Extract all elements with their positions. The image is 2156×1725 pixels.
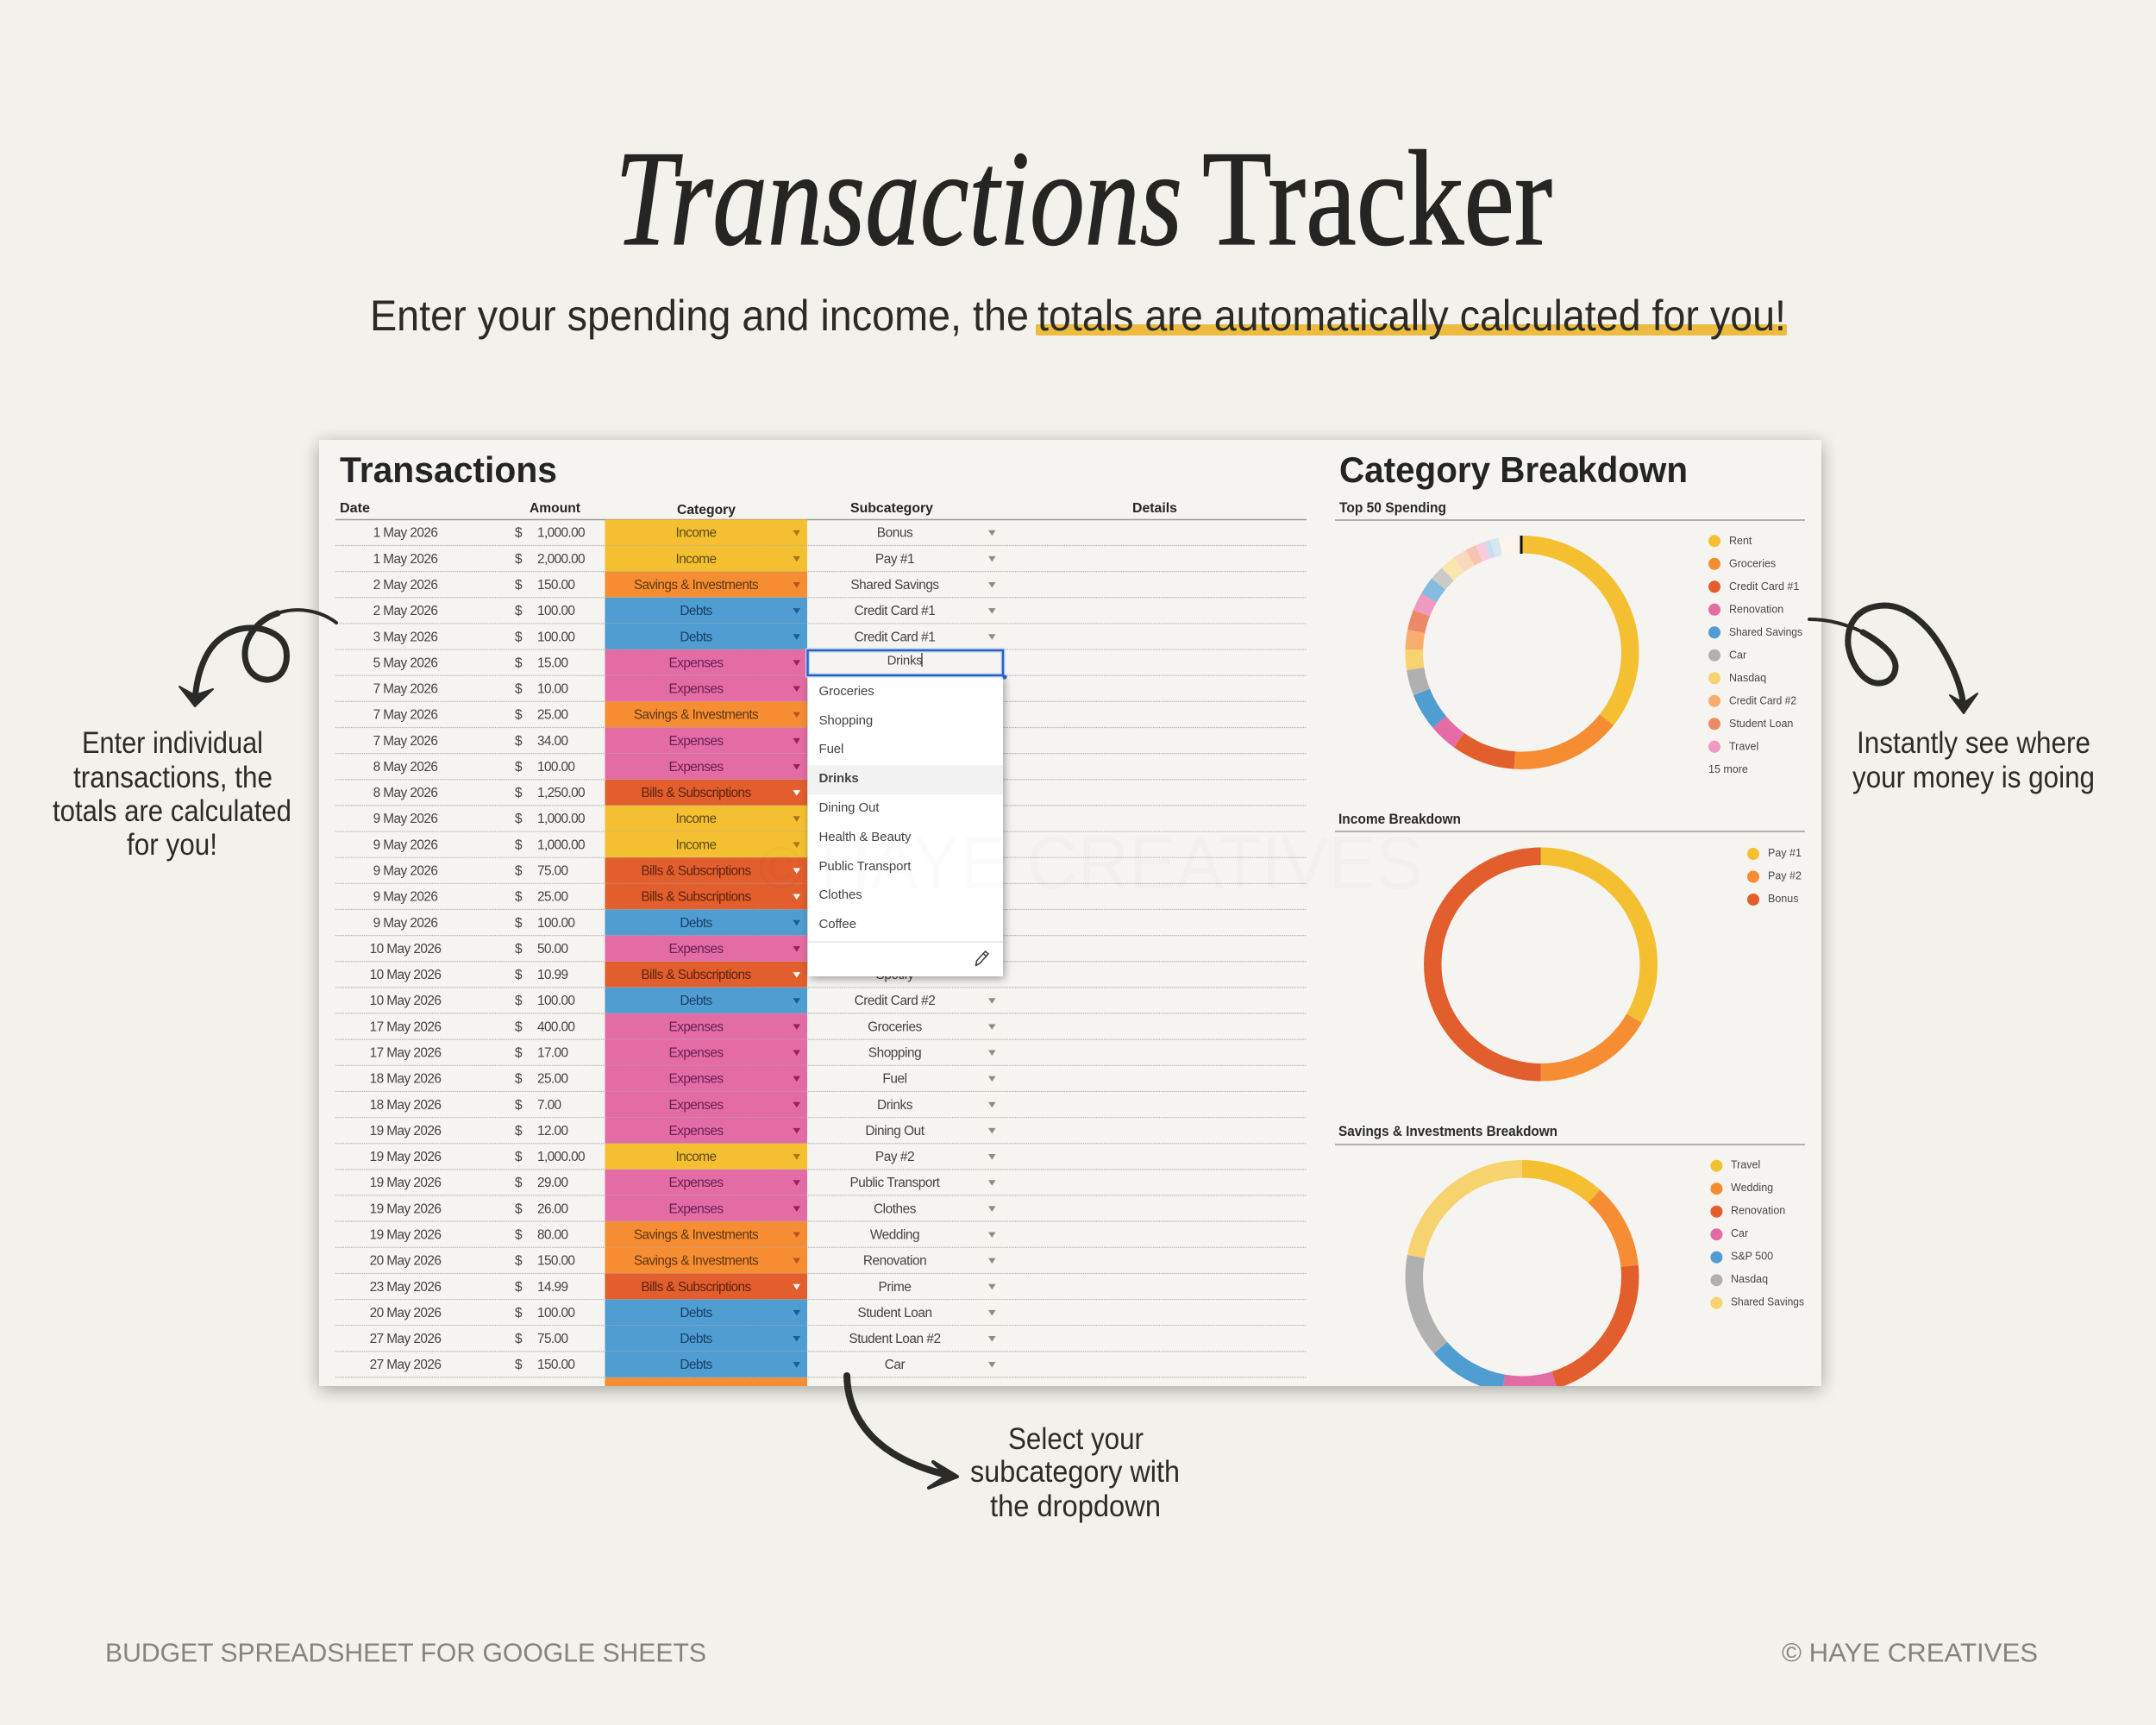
table row 28 bbox=[335, 1221, 1307, 1248]
donut chart: Savings and Investments Breakdown bbox=[1414, 1169, 1630, 1385]
table row 15: 25.00 bbox=[537, 890, 567, 905]
table row 17: 10 May 2026 bbox=[370, 942, 441, 957]
section heading: Income Breakdown: Income Breakdown bbox=[1338, 811, 1461, 827]
table row 27: $ bbox=[515, 1201, 523, 1216]
table row 21: $ bbox=[515, 1045, 523, 1060]
legend: Income Breakdown: Bonus bbox=[1768, 893, 1798, 905]
table row 22: $ bbox=[515, 1072, 523, 1087]
table row 32: $ bbox=[515, 1332, 523, 1346]
active input cell bbox=[807, 650, 1007, 680]
section heading: Top 50 Spending: Top 50 Spending bbox=[1339, 499, 1446, 516]
table row 14: $ bbox=[515, 864, 523, 879]
table row 5: 100.00 bbox=[537, 630, 574, 644]
table row 27: 26.00 bbox=[537, 1201, 567, 1216]
table row 30: Bills & Subscriptions bbox=[641, 1280, 752, 1295]
callout: bottom bbox=[970, 1421, 1180, 1523]
table row 29: Renovation bbox=[863, 1254, 926, 1269]
table row 12: 9 May 2026 bbox=[373, 812, 437, 826]
subtitle with highlight bbox=[370, 292, 1787, 340]
table row 31 bbox=[335, 1300, 1307, 1326]
legend: Savings and Investments Breakdown: Car bbox=[1731, 1227, 1748, 1239]
spreadsheet panel shadow bbox=[319, 443, 1821, 1389]
table row 5: 3 May 2026 bbox=[373, 630, 437, 644]
table row 31: Debts bbox=[680, 1306, 713, 1320]
table row 25: $ bbox=[515, 1150, 523, 1164]
table row 30 bbox=[335, 1274, 1307, 1300]
table row 27: 19 May 2026 bbox=[370, 1201, 441, 1216]
table row 29: $ bbox=[515, 1254, 523, 1269]
table row 2 bbox=[335, 546, 1307, 572]
legend: Savings and Investments Breakdown: Travel bbox=[1731, 1159, 1760, 1171]
table row 16: Debts bbox=[680, 916, 713, 931]
table row 10: 100.00 bbox=[537, 760, 574, 775]
callout: right: your money is going bbox=[1852, 760, 2095, 794]
table row 14: Bills & Subscriptions bbox=[641, 864, 752, 879]
table row 30: 14.99 bbox=[537, 1280, 567, 1295]
donut chart: Income Breakdown bbox=[1432, 856, 1649, 1072]
dropdown menu shadow bbox=[810, 678, 1005, 979]
callout: left bbox=[53, 725, 291, 862]
table row 17: $ bbox=[515, 942, 523, 957]
table row 5 bbox=[335, 624, 1307, 650]
table row 30: $ bbox=[515, 1280, 523, 1295]
legend: Savings and Investments Breakdown: Wedding bbox=[1731, 1182, 1773, 1194]
table header bbox=[335, 501, 1307, 519]
table row 4: $ bbox=[515, 604, 523, 618]
table row 1 bbox=[335, 519, 1307, 546]
table row 20: 400.00 bbox=[537, 1019, 574, 1034]
table row 24: Dining Out bbox=[865, 1124, 925, 1138]
table row 6: 5 May 2026 bbox=[373, 656, 437, 670]
callout: bottom: the dropdown bbox=[990, 1489, 1161, 1523]
table row 24: Expenses bbox=[669, 1124, 724, 1138]
table row 33: Car bbox=[885, 1358, 906, 1372]
table row 15: Bills & Subscriptions bbox=[641, 890, 752, 905]
active input cell: Drinks bbox=[887, 654, 922, 668]
legend: Savings and Investments Breakdown bbox=[1710, 1159, 1804, 1309]
table row 18: Spotify bbox=[876, 968, 914, 982]
dropdown menu: Health & Beauty bbox=[819, 830, 912, 844]
title: Transactions bbox=[615, 123, 1182, 274]
table row 6: $ bbox=[515, 656, 523, 670]
dropdown menu: Clothes bbox=[819, 888, 862, 902]
table row 22: 18 May 2026 bbox=[370, 1072, 441, 1087]
table row 9: $ bbox=[515, 734, 523, 749]
table row 4: Debts bbox=[680, 604, 713, 618]
table row 12: Income bbox=[676, 812, 717, 826]
table row 12: $ bbox=[515, 812, 523, 826]
legend: Top 50 Spending: Credit Card #1 bbox=[1729, 580, 1799, 593]
legend: Top 50 Spending: Credit Card #2 bbox=[1729, 695, 1796, 707]
dropdown menu bbox=[808, 675, 1003, 976]
table row 8: 25.00 bbox=[537, 708, 567, 723]
table row 19: $ bbox=[515, 994, 523, 1008]
table row 33: $ bbox=[515, 1358, 523, 1372]
table row 19: Credit Card #2 bbox=[855, 994, 935, 1008]
panel heading: Transactions: Transactions bbox=[340, 449, 557, 490]
table row 9 bbox=[335, 728, 1307, 754]
table row 30: Prime bbox=[879, 1280, 911, 1295]
table row 10 bbox=[335, 754, 1307, 780]
table row 18: $ bbox=[515, 968, 523, 982]
table row 1: 1 May 2026 bbox=[373, 526, 437, 541]
table row 7: $ bbox=[515, 682, 523, 697]
callout: right bbox=[1852, 725, 2095, 794]
table row 21: 17 May 2026 bbox=[370, 1045, 441, 1060]
table row 6: 15.00 bbox=[537, 656, 567, 670]
table row 26: 19 May 2026 bbox=[370, 1176, 441, 1190]
table row 3: 2 May 2026 bbox=[373, 578, 437, 593]
table row 19: Debts bbox=[680, 994, 713, 1008]
subtitle with highlight: Enter your spending and income, the bbox=[370, 292, 1029, 340]
title: Tracker bbox=[1202, 123, 1552, 274]
table row 19: 100.00 bbox=[537, 994, 574, 1008]
table row 4 bbox=[335, 598, 1307, 624]
footer: right credit: © HAYE CREATIVES bbox=[1782, 1637, 2038, 1668]
legend: Savings and Investments Breakdown: Shared Savings bbox=[1731, 1295, 1804, 1308]
table row 22 bbox=[335, 1065, 1307, 1092]
arrow: bottom bbox=[847, 1376, 957, 1488]
table row 25: 1,000.00 bbox=[537, 1150, 585, 1164]
table row 1: 1,000.00 bbox=[537, 526, 585, 541]
callout: left: Enter individual bbox=[82, 725, 263, 760]
table row 27 bbox=[335, 1195, 1307, 1222]
table row 22: 25.00 bbox=[537, 1072, 567, 1087]
table row 21 bbox=[335, 1039, 1307, 1066]
table row 8: $ bbox=[515, 708, 523, 723]
table row 13 bbox=[335, 831, 1307, 858]
table row 17: 50.00 bbox=[537, 942, 567, 957]
table row 10: 8 May 2026 bbox=[373, 760, 437, 775]
table row 11: Bills & Subscriptions bbox=[641, 786, 752, 800]
table row 10: Expenses bbox=[669, 760, 724, 775]
table row 25 bbox=[335, 1144, 1307, 1170]
legend: Top 50 Spending: 15 more bbox=[1708, 763, 1748, 775]
table row 23: 7.00 bbox=[537, 1098, 561, 1113]
legend: Income Breakdown: Pay #2 bbox=[1768, 869, 1802, 881]
callout: left: transactions, the bbox=[73, 760, 273, 794]
table row 14: 9 May 2026 bbox=[373, 864, 437, 879]
dropdown menu: Public Transport bbox=[819, 859, 912, 874]
table row 7: 7 May 2026 bbox=[373, 682, 437, 697]
legend: Savings and Investments Breakdown: Nasdaq bbox=[1731, 1273, 1768, 1285]
table row 29: 20 May 2026 bbox=[370, 1254, 441, 1269]
table row 4: 100.00 bbox=[537, 604, 574, 618]
dropdown menu: Fuel bbox=[819, 742, 843, 756]
table row 28: 80.00 bbox=[537, 1227, 567, 1242]
table row 13: 9 May 2026 bbox=[373, 837, 437, 852]
table row 28: $ bbox=[515, 1227, 523, 1242]
table row 20: Expenses bbox=[669, 1019, 724, 1034]
table row 11: 1,250.00 bbox=[537, 786, 585, 800]
table row 8: Savings & Investments bbox=[634, 708, 759, 723]
table row 11: $ bbox=[515, 786, 523, 800]
table row 3 bbox=[335, 572, 1307, 598]
table row 32 bbox=[335, 1326, 1307, 1352]
table row 1: Bonus bbox=[877, 526, 913, 541]
table row 32: 75.00 bbox=[537, 1332, 567, 1346]
table row 13: $ bbox=[515, 837, 523, 852]
table row 1: Income bbox=[676, 526, 717, 541]
table row 10: $ bbox=[515, 760, 523, 775]
table row 9: Expenses bbox=[669, 734, 724, 749]
table header: Date bbox=[340, 501, 370, 516]
arrow: right curl bbox=[1809, 605, 1977, 713]
section heading: Savings and Investments Breakdown: Savings & Investments Breakdown bbox=[1338, 1123, 1557, 1139]
table row 34 cut off at panel edge bbox=[605, 1378, 807, 1386]
legend: Income Breakdown: Pay #1 bbox=[1768, 847, 1802, 859]
table row 26 bbox=[335, 1170, 1307, 1195]
table row 32: Student Loan #2 bbox=[849, 1332, 941, 1346]
table row 21: 17.00 bbox=[537, 1045, 567, 1060]
table row 6: Expenses bbox=[669, 656, 724, 670]
table row 5: Credit Card #1 bbox=[855, 630, 935, 644]
subtitle with highlight: totals are automatically calculated for you! bbox=[1037, 292, 1786, 340]
table row 2: Income bbox=[676, 552, 717, 567]
table row 32: Debts bbox=[680, 1332, 713, 1346]
table row 22: Expenses bbox=[669, 1072, 724, 1087]
table row 21: Shopping bbox=[868, 1045, 921, 1060]
table row 29 bbox=[335, 1247, 1307, 1274]
top marker on donut bbox=[1520, 536, 1523, 554]
table row 4: Credit Card #1 bbox=[855, 604, 935, 618]
table header: Details bbox=[1132, 501, 1177, 516]
legend: Income Breakdown bbox=[1747, 847, 1802, 906]
dropdown menu: Dining Out bbox=[819, 800, 880, 815]
legend: Top 50 Spending: Travel bbox=[1729, 740, 1758, 752]
table row 18: Bills & Subscriptions bbox=[641, 968, 752, 982]
legend: Top 50 Spending bbox=[1708, 535, 1802, 775]
table row 2: 2,000.00 bbox=[537, 552, 585, 567]
table row 25: Income bbox=[676, 1150, 717, 1164]
dropdown menu: Shopping bbox=[819, 713, 873, 728]
table row 12 bbox=[335, 806, 1307, 832]
table row 12: 1,000.00 bbox=[537, 812, 585, 826]
table row 13: Income bbox=[676, 837, 717, 852]
table row 28: 19 May 2026 bbox=[370, 1227, 441, 1242]
table row 18: 10.99 bbox=[537, 968, 567, 982]
table row 3: $ bbox=[515, 578, 523, 593]
table row 3: Savings & Investments bbox=[634, 578, 759, 593]
table header: Subcategory bbox=[850, 501, 933, 516]
table row 7: Expenses bbox=[669, 682, 724, 697]
table row 2: 1 May 2026 bbox=[373, 552, 437, 567]
table row 25: Pay #2 bbox=[875, 1150, 914, 1164]
icon: pencil bbox=[976, 951, 988, 966]
legend: Top 50 Spending: Renovation bbox=[1729, 604, 1783, 616]
table row 26: Public Transport bbox=[849, 1176, 941, 1190]
table row 23: Expenses bbox=[669, 1098, 724, 1113]
table row 24 bbox=[335, 1118, 1307, 1144]
table row 27: Expenses bbox=[669, 1201, 724, 1216]
donut chart: Top 50 Spending bbox=[1414, 544, 1630, 761]
table row 20: 17 May 2026 bbox=[370, 1019, 441, 1034]
table row 17 bbox=[335, 936, 1307, 962]
table row 20: Groceries bbox=[868, 1019, 923, 1034]
table row 5: $ bbox=[515, 630, 523, 644]
table row 14 bbox=[335, 857, 1307, 884]
table row 31: 100.00 bbox=[537, 1306, 574, 1320]
legend: Top 50 Spending: Shared Savings bbox=[1729, 626, 1802, 638]
legend: Top 50 Spending: Nasdaq bbox=[1729, 672, 1766, 684]
table row 33 bbox=[335, 1352, 1307, 1377]
legend: Top 50 Spending: Student Loan bbox=[1729, 718, 1793, 730]
callout: left: totals are calculated bbox=[53, 794, 291, 828]
table row 23: 18 May 2026 bbox=[370, 1098, 441, 1113]
table row 24: $ bbox=[515, 1124, 523, 1138]
table row 24: 19 May 2026 bbox=[370, 1124, 441, 1138]
table row 21: Expenses bbox=[669, 1045, 724, 1060]
table row 7: 10.00 bbox=[537, 682, 567, 697]
table row 15: $ bbox=[515, 890, 523, 905]
heading: Category Breakdown: Category Breakdown bbox=[1339, 449, 1688, 490]
table row 31: $ bbox=[515, 1306, 523, 1320]
table row 28: Savings & Investments bbox=[634, 1227, 759, 1242]
table row 27: Clothes bbox=[874, 1201, 917, 1216]
table row 26: 29.00 bbox=[537, 1176, 567, 1190]
table row 24: 12.00 bbox=[537, 1124, 567, 1138]
table row 3: Shared Savings bbox=[850, 578, 939, 593]
table row 19: 10 May 2026 bbox=[370, 994, 441, 1008]
table row 4: 2 May 2026 bbox=[373, 604, 437, 618]
table row 16 bbox=[335, 910, 1307, 936]
table row 22: Fuel bbox=[882, 1072, 907, 1087]
table row 31: 20 May 2026 bbox=[370, 1306, 441, 1320]
table row 25: 19 May 2026 bbox=[370, 1150, 441, 1164]
table row 29: 150.00 bbox=[537, 1254, 574, 1269]
table row 2: Pay #1 bbox=[875, 552, 914, 567]
table row 26: $ bbox=[515, 1176, 523, 1190]
callout: bottom: Select your bbox=[1008, 1421, 1144, 1456]
table row 14: 75.00 bbox=[537, 864, 567, 879]
table row 30: 23 May 2026 bbox=[370, 1280, 441, 1295]
table row 5: Debts bbox=[680, 630, 713, 644]
spreadsheet panel bbox=[319, 440, 1821, 1389]
legend: Savings and Investments Breakdown: S&P 500 bbox=[1731, 1251, 1773, 1263]
dropdown menu: Groceries bbox=[819, 684, 874, 699]
table row 20: $ bbox=[515, 1019, 523, 1034]
dropdown menu: Drinks bbox=[819, 771, 859, 786]
table row 17: Expenses bbox=[669, 942, 724, 957]
table row 16: 100.00 bbox=[537, 916, 574, 931]
table row 2: $ bbox=[515, 552, 523, 567]
table row 15 bbox=[335, 883, 1307, 910]
dropdown menu: Coffee bbox=[819, 917, 856, 932]
table row 13: 1,000.00 bbox=[537, 837, 585, 852]
legend: Top 50 Spending: Groceries bbox=[1729, 557, 1776, 569]
table row 15: 9 May 2026 bbox=[373, 890, 437, 905]
arrow: left curl bbox=[179, 610, 336, 706]
table row 28: Wedding bbox=[870, 1227, 919, 1242]
table header: Amount bbox=[530, 501, 581, 516]
legend: Savings and Investments Breakdown: Renovation bbox=[1731, 1204, 1785, 1216]
table row 7 bbox=[335, 675, 1307, 702]
legend: Top 50 Spending: Car bbox=[1729, 649, 1746, 661]
callout: bottom: subcategory with bbox=[970, 1454, 1180, 1489]
table row 31: Student Loan bbox=[857, 1306, 932, 1320]
table row 23 bbox=[335, 1092, 1307, 1118]
table row 8 bbox=[335, 701, 1307, 728]
table row 18 bbox=[335, 962, 1307, 988]
table row 26: Expenses bbox=[669, 1176, 724, 1190]
table row 9: 7 May 2026 bbox=[373, 734, 437, 749]
table row 18: 10 May 2026 bbox=[370, 968, 441, 982]
table row 3: 150.00 bbox=[537, 578, 574, 593]
table row 32: 27 May 2026 bbox=[370, 1332, 441, 1346]
table row 6 bbox=[335, 649, 1307, 676]
table row 20 bbox=[335, 1013, 1307, 1040]
table row 1: $ bbox=[515, 526, 523, 541]
table row 23: Drinks bbox=[877, 1098, 913, 1113]
table row 33: 27 May 2026 bbox=[370, 1358, 441, 1372]
table row 33: 150.00 bbox=[537, 1358, 574, 1372]
callout: left: for you! bbox=[127, 827, 217, 862]
table header: Category bbox=[677, 503, 736, 518]
table row 19 bbox=[335, 988, 1307, 1014]
callout: right: Instantly see where bbox=[1857, 725, 2090, 760]
table row 8: 7 May 2026 bbox=[373, 708, 437, 723]
table row 16: 9 May 2026 bbox=[373, 916, 437, 931]
footer: left label: BUDGET SPREADSHEET FOR GOOGLE SHEETS bbox=[105, 1637, 706, 1668]
legend: Top 50 Spending: Rent bbox=[1729, 535, 1752, 547]
table row 11 bbox=[335, 780, 1307, 806]
table row 11: 8 May 2026 bbox=[373, 786, 437, 800]
table row 9: 34.00 bbox=[537, 734, 567, 749]
table row 23: $ bbox=[515, 1098, 523, 1113]
table row 29: Savings & Investments bbox=[634, 1254, 759, 1269]
table row 16: $ bbox=[515, 916, 523, 931]
table row 33: Debts bbox=[680, 1358, 713, 1372]
